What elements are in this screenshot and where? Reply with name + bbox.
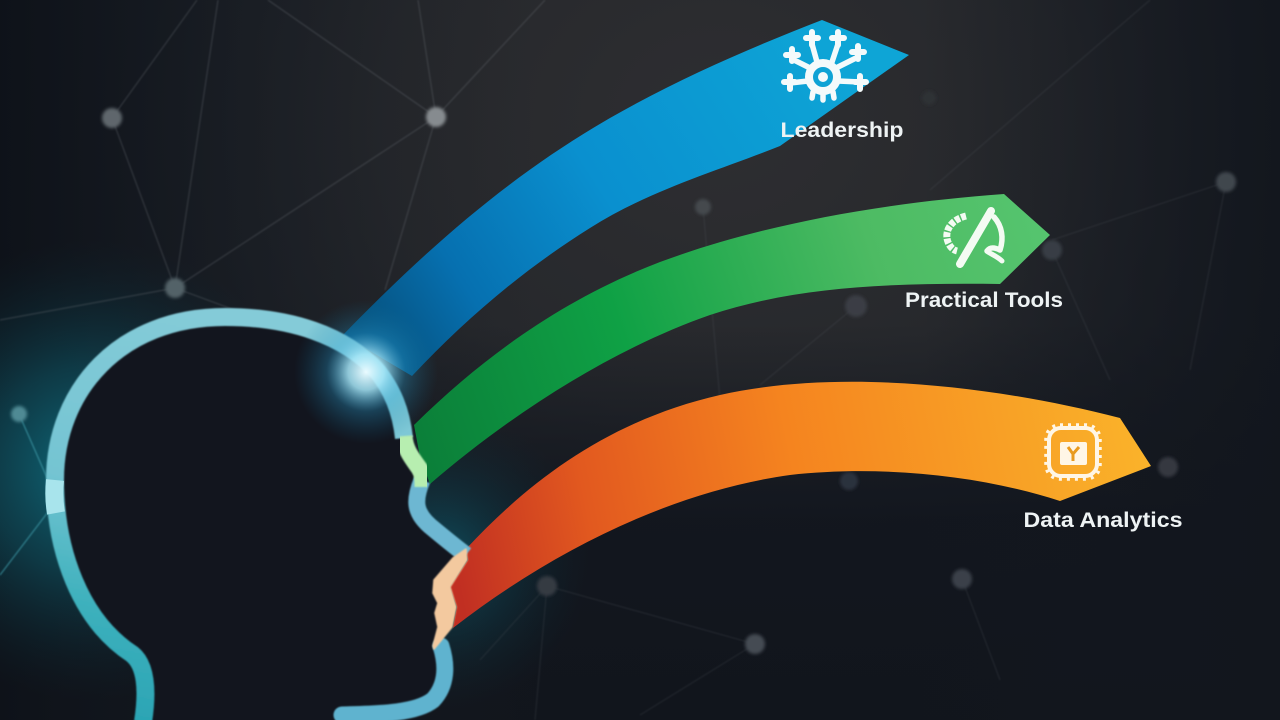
ribbon: Data Analytics (orange) [450,382,1151,628]
head outline: forehead highlight [404,436,423,487]
teal network lines [0,414,48,575]
label: Practical Tools: Practical Tools [905,289,1063,312]
label: Data Analytics: Data Analytics [1024,509,1182,532]
icon: chip gear (Data Analytics) [1046,425,1100,479]
head outline: lips in peach [433,549,467,649]
network nodes [11,91,1236,654]
head outline [55,317,467,720]
faint right network lines [480,0,1226,720]
ribbon: Practical Tools (green) [414,194,1050,484]
left contour highlight [54,480,56,513]
head outline: chin and neck [342,646,445,715]
icon: network brain (Leadership) [784,32,866,100]
head outline: brow to nose [417,480,466,555]
label: Leadership: Leadership [780,119,904,142]
icon: gear and wrench (Practical Tools) [947,211,1002,264]
head silhouette fill [56,318,462,720]
head outline: cranium stroke [55,317,404,720]
blue light flare at crown [294,300,438,444]
network lines [0,0,545,320]
ribbon: Leadership (blue) [343,20,909,376]
